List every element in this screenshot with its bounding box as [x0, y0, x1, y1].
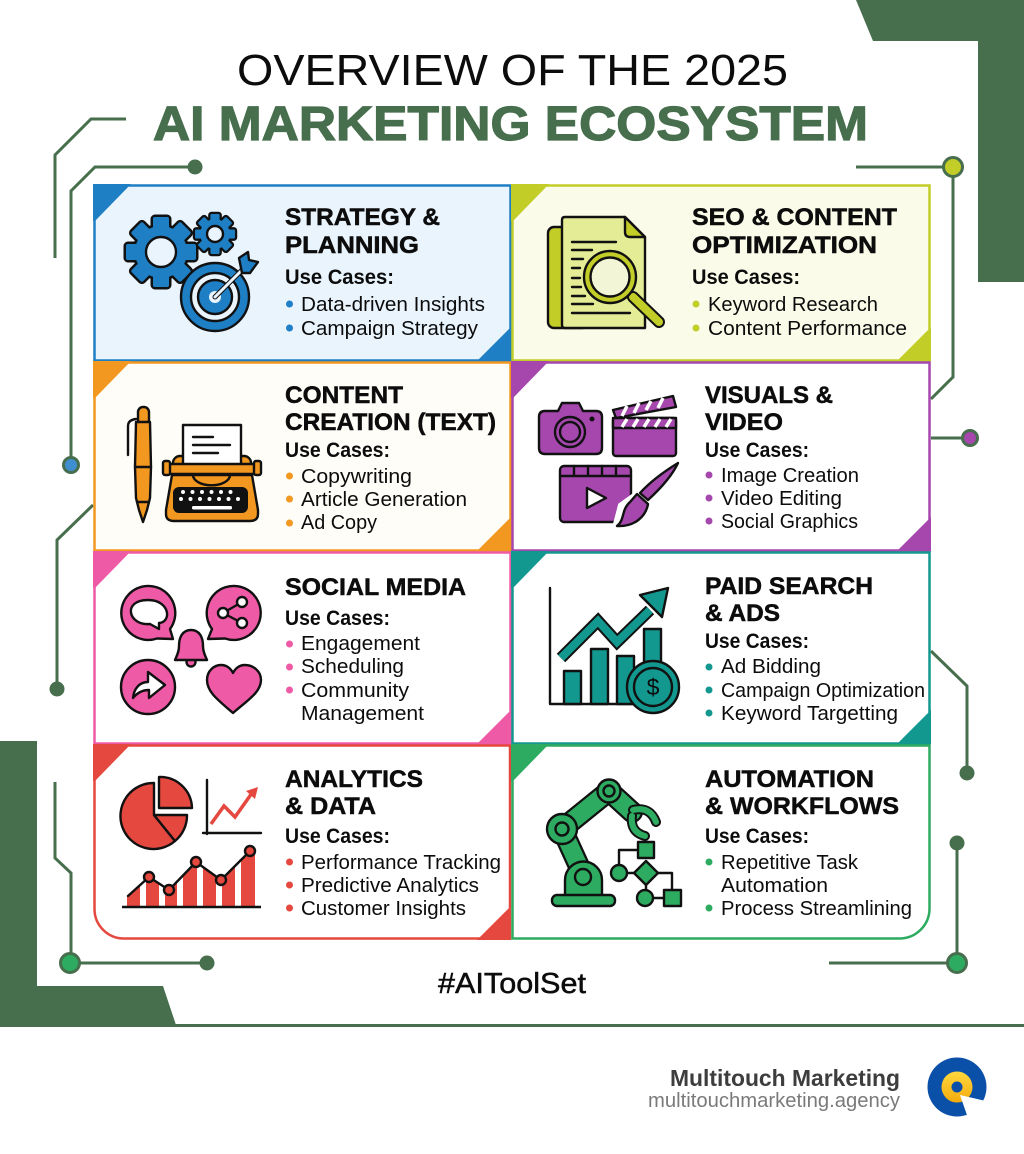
frame: top right green corner [856, 0, 1024, 282]
icon: trend line [203, 780, 261, 834]
text: visuals and video: VISUALS & [705, 382, 833, 409]
text: automation and workflows: Use Cases: [705, 825, 809, 848]
text: visuals and video: Image Creation [721, 465, 859, 487]
icon: camera [539, 403, 602, 454]
text: seo and content optimization: Use Cases: [692, 266, 800, 289]
text: social media: Community [301, 680, 409, 702]
icon: document and magnifier [548, 217, 659, 328]
text: analytics and data: ANALYTICS [285, 766, 423, 793]
text: analytics and data: Performance Tracking [301, 852, 501, 874]
text: strategy and planning: Campaign Strategy [301, 318, 478, 340]
text: paid search and ads: Keyword Targetting [721, 703, 898, 725]
footer: brand text: Multitouch Marketing [670, 1065, 900, 1091]
text: analytics and data: Use Cases: [285, 825, 390, 848]
icon: growth chart and coin [550, 588, 679, 713]
icon: clapperboard [613, 396, 676, 456]
icon: robot arm [547, 780, 656, 906]
text: strategy and planning [285, 204, 485, 340]
icon: bar and line chart [122, 846, 261, 907]
frame: bottom rule [0, 1024, 1024, 1027]
text: automation and workflows: Automation [721, 875, 828, 897]
icon: bell [175, 630, 207, 666]
text: visuals and video: VIDEO [705, 409, 783, 436]
icon: video player [560, 466, 631, 522]
panel: social media [93, 551, 511, 744]
text: content creation: Article Generation [301, 489, 467, 511]
icon: pen [128, 407, 151, 522]
footer: brand text [648, 1065, 900, 1112]
text: social media: Use Cases: [285, 607, 390, 630]
text: paid search and ads: & ADS [705, 600, 780, 627]
circuit traces [50, 119, 978, 972]
title: OVERVIEW OF THE 2025 [237, 46, 788, 95]
text: analytics and data: & DATA [285, 793, 376, 820]
text: paid search and ads: Campaign Optimization [721, 680, 925, 702]
text: paid search and ads: Use Cases: [705, 630, 809, 653]
text: social media [285, 574, 466, 725]
text: social media: Scheduling [301, 656, 404, 678]
panel: automation and workflows [511, 744, 930, 939]
icon: paintbrush [614, 463, 678, 528]
text: automation and workflows: Repetitive Task [721, 852, 859, 874]
text: seo and content optimization: Content Performance [708, 318, 907, 340]
text: strategy and planning: PLANNING [285, 232, 419, 259]
text: content creation [285, 382, 496, 534]
text: automation and workflows: & WORKFLOWS [705, 793, 899, 820]
footer: logo [928, 1058, 990, 1122]
text: analytics and data [285, 766, 501, 920]
icon: typewriter [163, 425, 261, 521]
text: strategy and planning: STRATEGY & [285, 204, 440, 231]
panel: paid search and ads [511, 551, 931, 744]
title [153, 46, 868, 151]
title: AI MARKETING ECOSYSTEM [153, 98, 868, 151]
icon: growth chart and coin: $ [647, 674, 660, 700]
icon: share bubble [207, 586, 261, 640]
text: seo and content optimization [692, 204, 907, 340]
footer: brand text: multitouchmarketing.agency [648, 1090, 900, 1112]
text: social media: Management [301, 703, 424, 725]
panel: visuals and video [511, 361, 931, 551]
panel: seo and content optimization [511, 184, 931, 361]
text: social media: Engagement [301, 633, 420, 655]
text: seo and content optimization: Keyword Research [708, 294, 878, 316]
text: analytics and data: Customer Insights [301, 898, 466, 920]
text: visuals and video: Use Cases: [705, 439, 809, 462]
text: social media: SOCIAL MEDIA [285, 574, 466, 601]
text: strategy and planning: Use Cases: [285, 266, 394, 289]
hashtag: #AIToolSet [438, 968, 586, 1000]
text: automation and workflows [705, 766, 912, 920]
text: seo and content optimization: SEO & CONTENT [692, 204, 897, 231]
icon: gears and target [126, 214, 258, 331]
text: automation and workflows: AUTOMATION [705, 766, 874, 793]
icon: pie chart [120, 777, 192, 849]
text: content creation: Ad Copy [301, 512, 377, 534]
panel: analytics and data [93, 744, 511, 940]
text: content creation: CONTENT [285, 382, 403, 409]
text: analytics and data: Predictive Analytics [301, 875, 479, 897]
text: paid search and ads: PAID SEARCH [705, 573, 873, 600]
text: visuals and video [705, 382, 859, 533]
panel: strategy and planning [93, 184, 511, 361]
text: visuals and video: Video Editing [721, 488, 842, 510]
panel: content creation [93, 361, 511, 551]
text: visuals and video: Social Graphics [721, 511, 858, 533]
frame: bottom left green corner [0, 741, 176, 1025]
text: content creation: Copywriting [301, 466, 412, 488]
icon: heart [207, 665, 261, 713]
icon: workflow diagram [611, 842, 681, 906]
text: paid search and ads: Ad Bidding [721, 656, 821, 678]
text: paid search and ads [705, 573, 925, 725]
text: strategy and planning: Data-driven Insights [301, 294, 485, 316]
text: seo and content optimization: OPTIMIZATION [692, 232, 877, 259]
icon: chat bubble [121, 586, 175, 640]
text: content creation: CREATION (TEXT) [285, 409, 496, 436]
icon: share arrow [121, 660, 175, 714]
text: automation and workflows: Process Streamlining [721, 898, 912, 920]
text: content creation: Use Cases: [285, 439, 390, 462]
